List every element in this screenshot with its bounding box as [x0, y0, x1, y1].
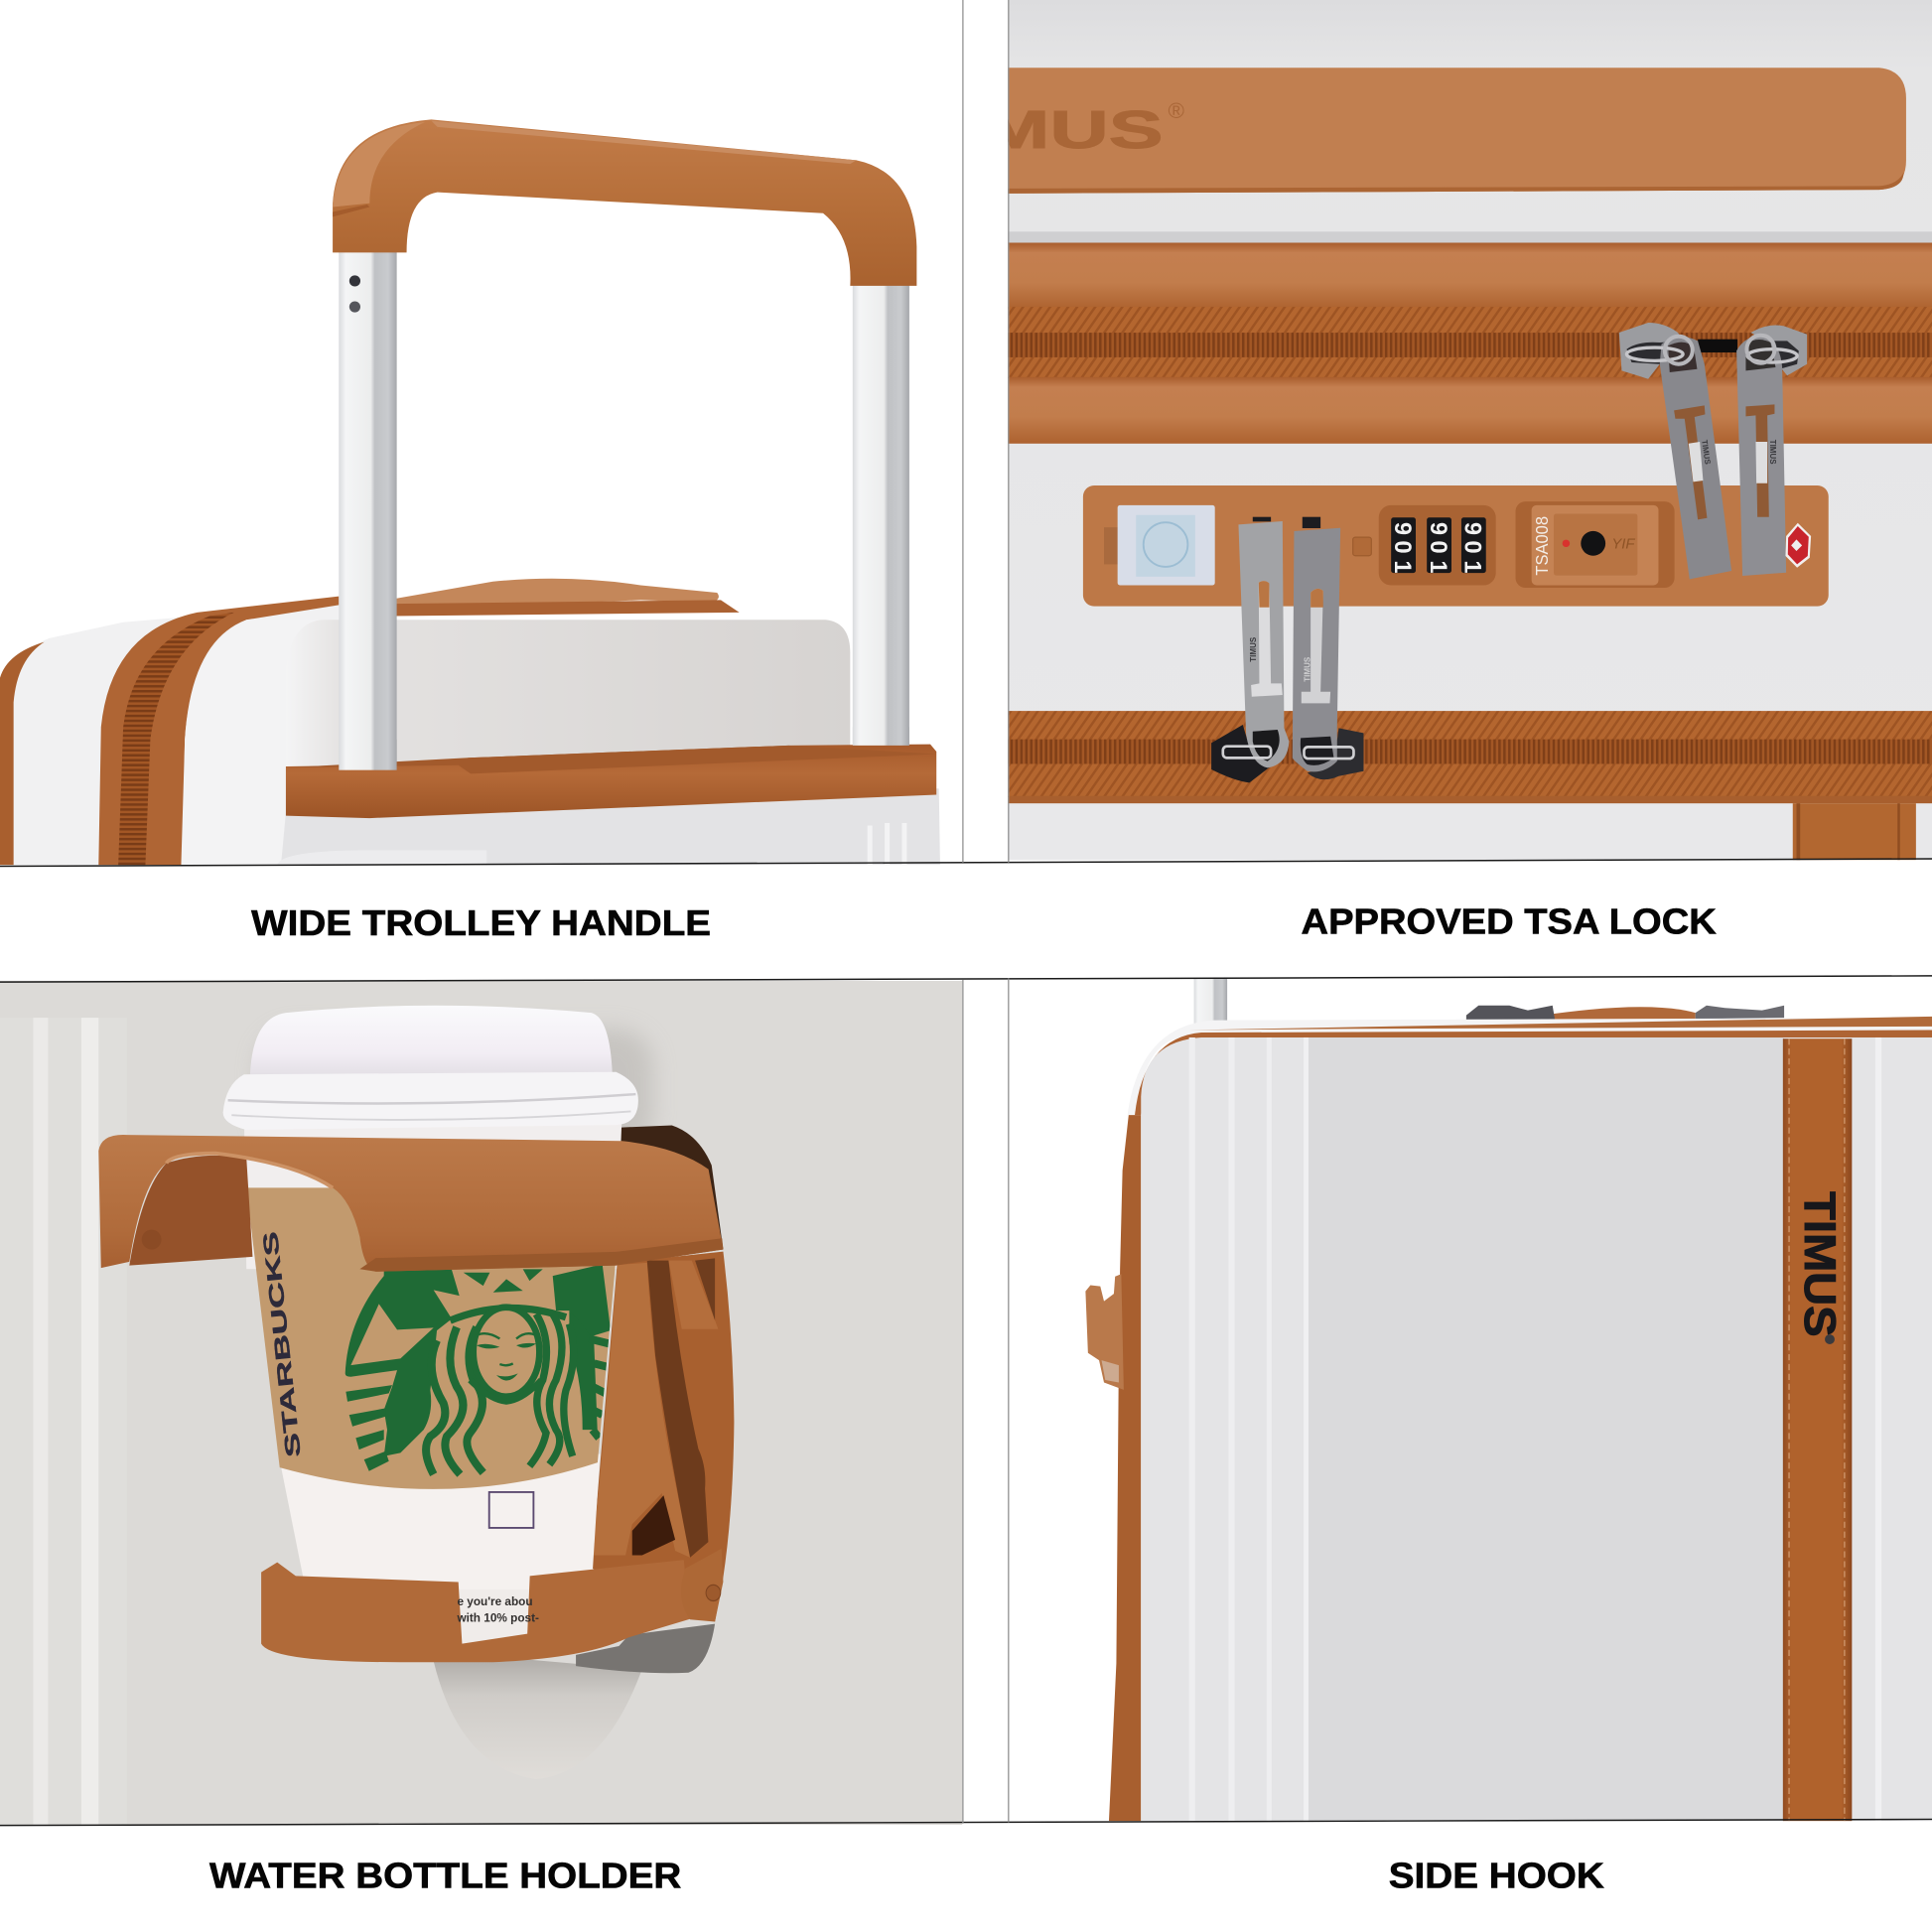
- cup text through ring: [456, 1595, 539, 1624]
- caption: approved TSA lock: APPROVED TSA LOCK: [1302, 901, 1717, 942]
- branded top bar: ®: [1169, 98, 1185, 123]
- combination wheels: 9: [1426, 522, 1451, 535]
- combination wheels: 1: [1460, 560, 1486, 573]
- stamp square: [1353, 537, 1371, 556]
- combination wheels: 9: [1460, 522, 1486, 535]
- shell ridges: [0, 1018, 127, 1825]
- combination wheels: 9: [1390, 522, 1416, 535]
- caption: water bottle holder: WATER BOTTLE HOLDER: [209, 1855, 681, 1895]
- cup text through ring: with 10% post-: [456, 1611, 539, 1624]
- wide handle grip: [333, 119, 916, 286]
- combination wheels: 1: [1390, 560, 1416, 573]
- pop-out mechanism: [576, 1125, 734, 1673]
- handle poles: [339, 246, 909, 773]
- strap logo: [1804, 1191, 1837, 1344]
- TSA lock: YIF: [1611, 536, 1635, 552]
- upper zipper pulls: TIMUS: [1768, 440, 1777, 465]
- charging sticker: [1104, 505, 1215, 586]
- lock plate: [1083, 485, 1829, 607]
- hard shell: [1141, 1037, 1932, 1821]
- caption: side hook: SIDE HOOK: [1389, 1855, 1604, 1895]
- divider rules: [0, 859, 1932, 1826]
- branded top bar: TIMUS: [909, 101, 1164, 160]
- TSA lock: [1516, 501, 1675, 588]
- panel: wide trolley handle: [0, 119, 940, 865]
- branded top bar: [909, 68, 1906, 194]
- panel: side hook: [1085, 978, 1932, 1821]
- shell background: [0, 981, 962, 1825]
- combination wheels: 0: [1390, 540, 1416, 554]
- coffee cup: [223, 1006, 638, 1651]
- panel: approved TSA lock: [909, 0, 1932, 860]
- combination wheels: 0: [1460, 540, 1486, 554]
- cup text through ring: e you're abou: [457, 1595, 533, 1608]
- cup body: [280, 1453, 600, 1589]
- left zipper edge: [1109, 1115, 1141, 1821]
- upper brown strip and zipper: [1008, 231, 1932, 444]
- caption: wide trolley handle: WIDE TROLLEY HANDLE: [251, 902, 711, 943]
- combination wheels: 1: [1426, 560, 1451, 573]
- top carry handle: [394, 579, 740, 617]
- combination wheels: [1379, 505, 1496, 586]
- lower zipper pulls: TIMUS: [1249, 636, 1258, 662]
- lower zipper: [1008, 711, 1932, 860]
- siren logo: [345, 1264, 611, 1474]
- combination wheels: 0: [1426, 540, 1451, 554]
- strap logo: TIMUS: [1795, 1191, 1844, 1337]
- holder bottom ring: [261, 1560, 690, 1662]
- upper zipper pulls: [1619, 323, 1807, 579]
- lid: [223, 1006, 638, 1130]
- sleeve wordmark: STARBUCKS: [259, 1230, 306, 1458]
- holder top arm: [98, 1135, 724, 1272]
- panel: water bottle holder: [0, 981, 962, 1825]
- lower zipper pulls: TIMUS: [1303, 656, 1311, 682]
- side hook: [1085, 1274, 1124, 1390]
- suitcase body: [0, 597, 940, 865]
- TSA diamond: [1785, 523, 1811, 568]
- panel rules: [963, 0, 1009, 1824]
- finger bump: [431, 1651, 642, 1779]
- lower zipper pulls: [1211, 517, 1363, 782]
- case piping: [1128, 1017, 1932, 1115]
- cardboard sleeve: [246, 1187, 617, 1489]
- top zipper and pulls: [1465, 1005, 1785, 1020]
- cup shadow: [259, 1029, 653, 1152]
- trolley pole behind case: [1194, 978, 1227, 1026]
- TSA lock: TSA008: [1532, 516, 1552, 576]
- shell background: [1008, 0, 1932, 860]
- leather strap: [1783, 1038, 1852, 1821]
- hinge joint: [681, 1549, 723, 1621]
- upper zipper pulls: TIMUS: [1700, 439, 1713, 466]
- brown base tray: [286, 727, 936, 818]
